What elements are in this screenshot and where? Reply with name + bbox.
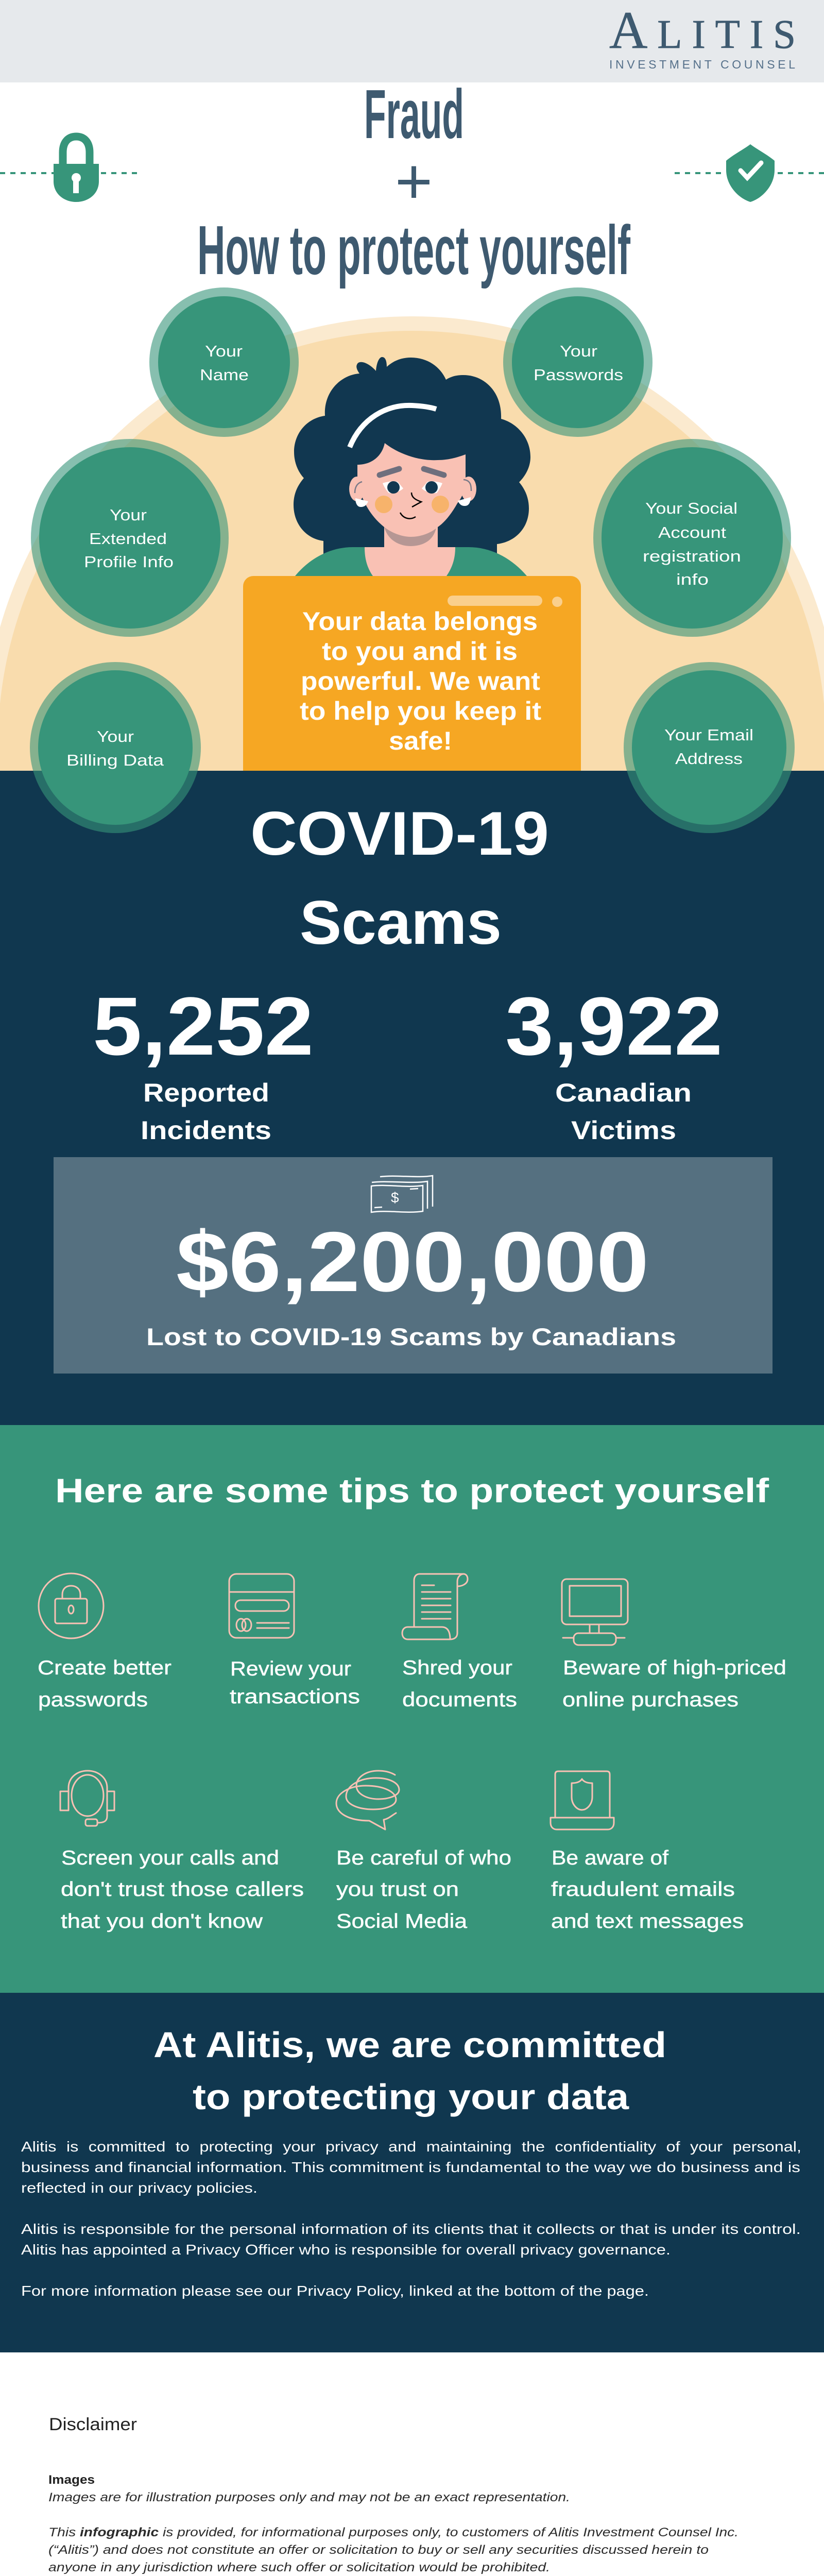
tip: fraudulent emails: Be aware of	[552, 1847, 668, 1869]
tip: careful on social media	[336, 1771, 511, 1933]
tip: screen calls	[60, 1771, 304, 1933]
bubble: your passwords: Passwords	[534, 366, 623, 384]
icon: laptop with shield	[551, 1771, 614, 1829]
tip: careful on social media: Be careful of who	[336, 1847, 511, 1869]
logo: Alitis Investment Counsel: ALITIS	[609, 1, 796, 60]
shirt	[295, 547, 527, 576]
hair	[294, 357, 530, 555]
stat: reported incidents: Incidents	[141, 1116, 271, 1145]
panel: total lost: Lost to COVID-19 Scams by Canadians	[146, 1323, 676, 1350]
text block: disclaimer purpose: anyone in any jurisdiction where such offer or solicitation would be prohibited.	[48, 2561, 550, 2574]
face	[357, 443, 466, 537]
text block: privacy commitment: Alitis is committed to protecting your privacy and maintaining the confidentiality of your personal,	[21, 2139, 801, 2155]
bubble: extended profile info	[31, 439, 229, 637]
tip: fraudulent emails	[551, 1771, 744, 1933]
bubble: extended profile info: Profile Info	[84, 553, 174, 571]
title	[197, 75, 631, 289]
heading: COVID-19 Scams: COVID-19	[250, 799, 549, 868]
panel: commitment background	[0, 1993, 824, 2352]
bubble: billing data: Billing Data	[66, 751, 164, 769]
bubble: billing data	[30, 662, 201, 833]
bubble: extended profile info: Extended	[89, 530, 167, 548]
icon: lock in circle	[39, 1573, 104, 1638]
title: +	[395, 146, 433, 217]
bubble: email address: Your Email	[664, 726, 753, 744]
tip: high-priced purchases: Beware of high-priced	[563, 1657, 786, 1679]
panel: tips background	[0, 1425, 824, 1993]
tip: screen calls: that you don't know	[61, 1910, 263, 1933]
heading: commitment: to protecting your data	[193, 2077, 629, 2117]
text block: disclaimer purpose	[48, 2526, 739, 2574]
icon: padlock with dotted line	[0, 137, 138, 202]
bubble: social account registration info: registration	[643, 547, 741, 565]
bubble: email address	[624, 662, 795, 833]
stat: canadian victims: Victims	[571, 1116, 676, 1145]
heading: tips: Here are some tips to protect yourself	[55, 1471, 769, 1510]
icon: paper scroll	[402, 1574, 468, 1639]
bubble: email address: Address	[675, 750, 743, 768]
tip: careful on social media: Social Media	[336, 1910, 467, 1933]
tip: shred documents: documents	[402, 1689, 517, 1711]
panel: total lost	[54, 1157, 772, 1374]
text block: disclaimer images	[48, 2473, 570, 2504]
tip: review transactions: transactions	[230, 1686, 360, 1708]
tip: review transactions: Review your	[230, 1658, 351, 1680]
icon: credit card	[229, 1574, 294, 1638]
bubble: your passwords	[503, 287, 653, 437]
icon: computer monitor	[562, 1579, 628, 1645]
stat: canadian victims	[505, 980, 723, 1145]
text block: disclaimer images: Images are for illustration purposes only and may not be an exact representation.	[48, 2490, 570, 2504]
bubble: your name: Your	[205, 342, 243, 360]
bubble: your passwords: Your	[560, 342, 597, 360]
heading: commitment: At Alitis, we are committed	[153, 2025, 666, 2065]
bubble: your name: Name	[200, 366, 249, 384]
bubble: social account registration info: Your Social	[645, 499, 737, 517]
heading: COVID-19 Scams	[250, 799, 549, 957]
bubble: extended profile info: Your	[110, 506, 147, 524]
heading: COVID-19 Scams: Scams	[300, 888, 502, 957]
title: Fraud	[364, 75, 464, 153]
tip: fraudulent emails: and text messages	[551, 1910, 744, 1933]
ears	[349, 477, 365, 501]
stat: reported incidents	[93, 980, 314, 1145]
icon: money stack: $	[391, 1190, 399, 1206]
bubble: billing data: Your	[97, 727, 134, 745]
tip: create better passwords: Create better	[38, 1657, 171, 1679]
text block: privacy commitment: Alitis is responsible for the personal information of its clients that it collects or that is under its control.	[21, 2221, 801, 2237]
tip: create better passwords: passwords	[38, 1689, 148, 1711]
tip: shred documents	[402, 1574, 517, 1711]
text block: privacy commitment: business and financial information. This commitment is fundamental to the way we do business and is	[21, 2159, 800, 2175]
logo: Alitis Investment Counsel: INVESTMENT COUNSEL	[609, 58, 795, 71]
peach sun background	[0, 316, 824, 1174]
message card	[243, 576, 581, 792]
tip: review transactions	[229, 1574, 360, 1708]
text block: privacy commitment: Alitis has appointed a Privacy Officer who is responsible for overall privacy governance.	[21, 2242, 671, 2258]
message card: to you and it is	[322, 637, 518, 666]
icon: headset	[60, 1771, 114, 1826]
header band	[0, 0, 824, 82]
stat: canadian victims: Canadian	[555, 1078, 692, 1107]
heading: commitment	[153, 2025, 666, 2117]
icon: speech bubble swirl	[336, 1771, 399, 1829]
bubble: your name	[149, 287, 299, 437]
bubble: social account registration info: info	[676, 570, 709, 588]
dark section: COVID background	[0, 771, 824, 1425]
message card: powerful. We want	[301, 667, 540, 696]
text block: disclaimer purpose: (“Alitis”) and does not constitute an offer or solicitation to buy or sell any securities discussed herein to	[48, 2543, 709, 2557]
text block: privacy commitment: For more information please see our Privacy Policy, linked at the bottom of the page.	[21, 2283, 649, 2299]
message card: Your data belongs	[302, 607, 538, 636]
stat: reported incidents: Reported	[143, 1078, 269, 1107]
message card: to help you keep it	[300, 697, 541, 725]
tip: careful on social media: you trust on	[336, 1878, 459, 1901]
illustration: woman	[294, 357, 530, 576]
panel: total lost: $6,200,000	[176, 1214, 649, 1309]
tip: create better passwords	[38, 1573, 171, 1711]
bubble: social account registration info: Account	[658, 523, 726, 541]
text block: privacy commitment: reflected in our privacy policies.	[21, 2180, 258, 2196]
tip: high-priced purchases	[562, 1579, 786, 1711]
stat: canadian victims: 3,922	[505, 980, 723, 1072]
bubble: social account registration info	[593, 439, 791, 637]
tip: fraudulent emails: fraudulent emails	[551, 1878, 735, 1901]
text block: disclaimer purpose: This infographic is provided, for informational purposes only, to customers of Alitis Investment Counsel Inc.	[48, 2526, 739, 2539]
tip: shred documents: Shred your	[402, 1657, 512, 1679]
stat: reported incidents: 5,252	[93, 980, 314, 1072]
neck and chest	[365, 523, 455, 576]
heading: disclaimer: Disclaimer	[49, 2415, 137, 2434]
tip: high-priced purchases: online purchases	[562, 1689, 739, 1711]
text block: disclaimer images: Images	[48, 2473, 95, 2487]
tip: screen calls: Screen your calls and	[61, 1847, 279, 1869]
message card: safe!	[389, 726, 452, 755]
icon: money stack	[371, 1176, 433, 1212]
icon: shield with check and dotted line	[675, 144, 824, 202]
text block: privacy commitment	[21, 2139, 801, 2299]
tip: screen calls: don't trust those callers	[61, 1878, 304, 1901]
